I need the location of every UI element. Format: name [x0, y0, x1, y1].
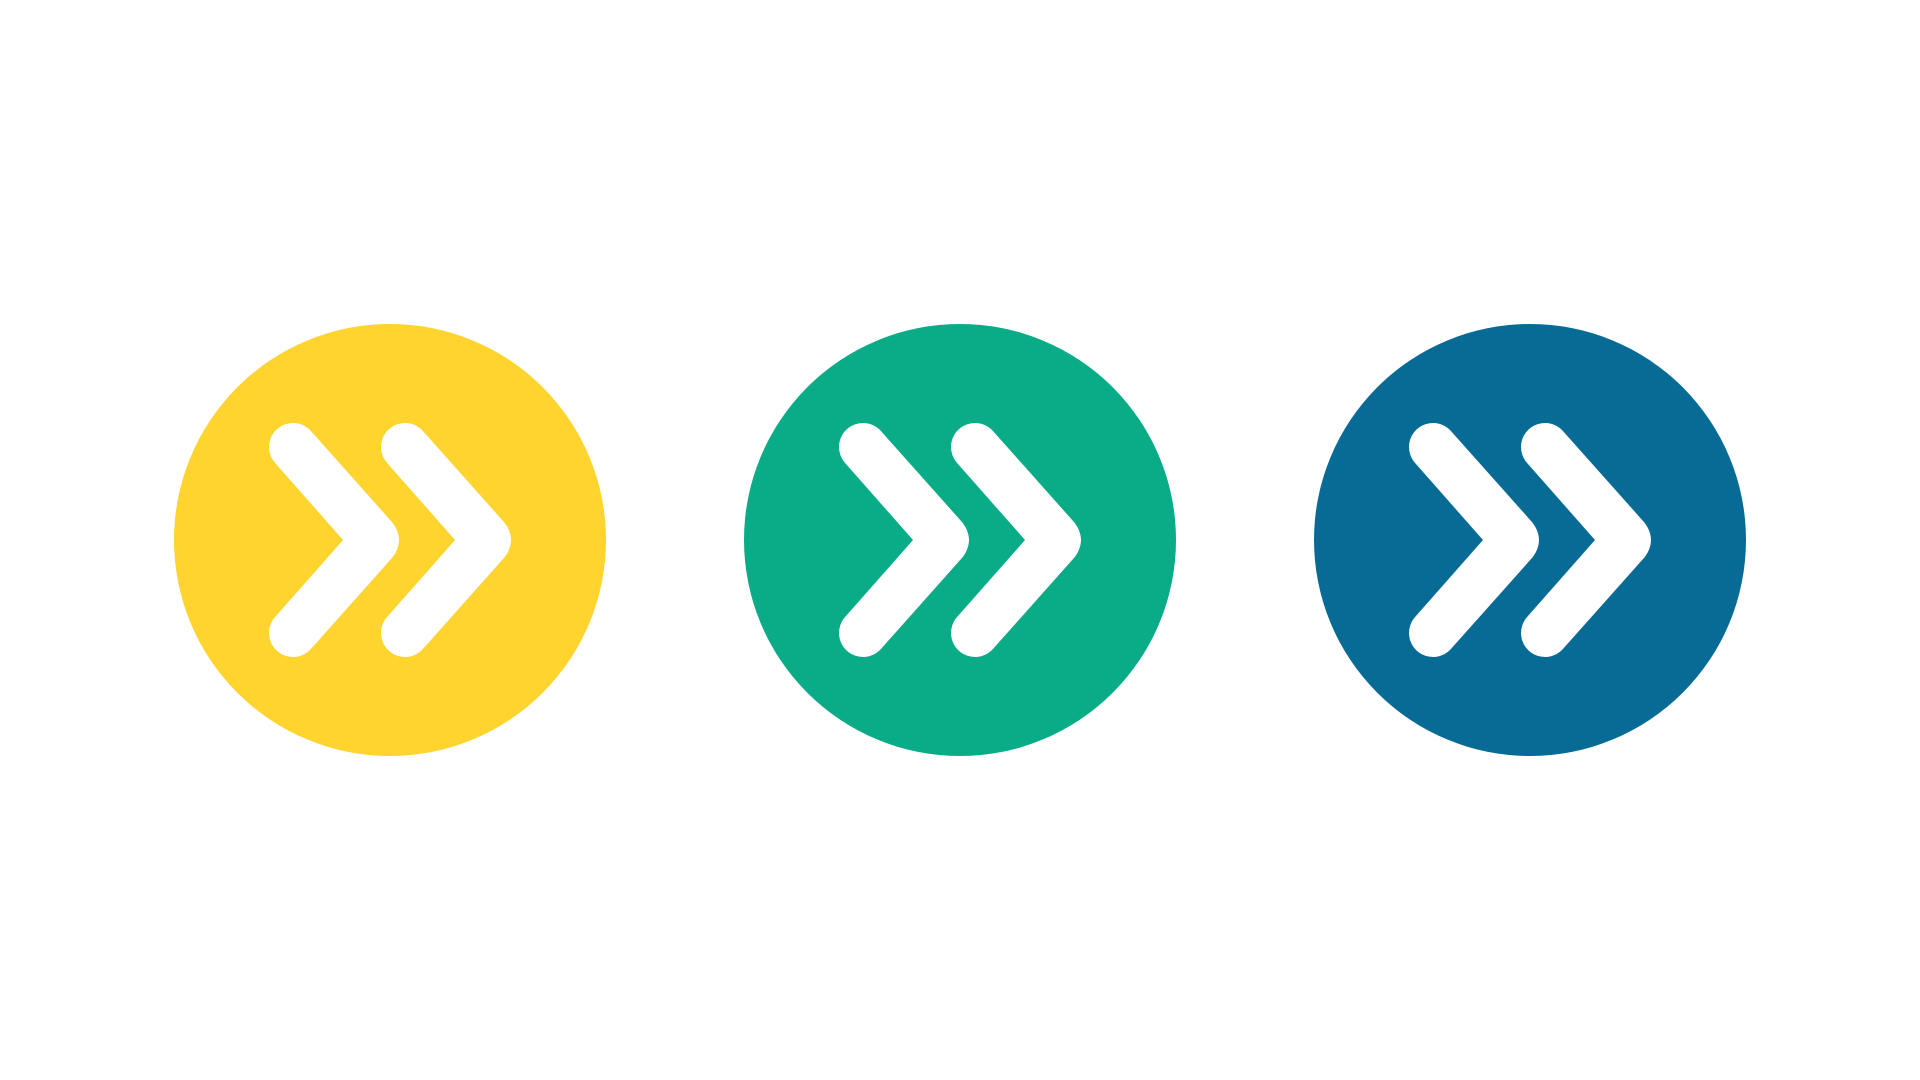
icon: green circle with double chevron — [744, 324, 1176, 756]
icon: yellow circle with double chevron — [174, 324, 606, 756]
icon: blue circle with double chevron — [1314, 324, 1746, 756]
